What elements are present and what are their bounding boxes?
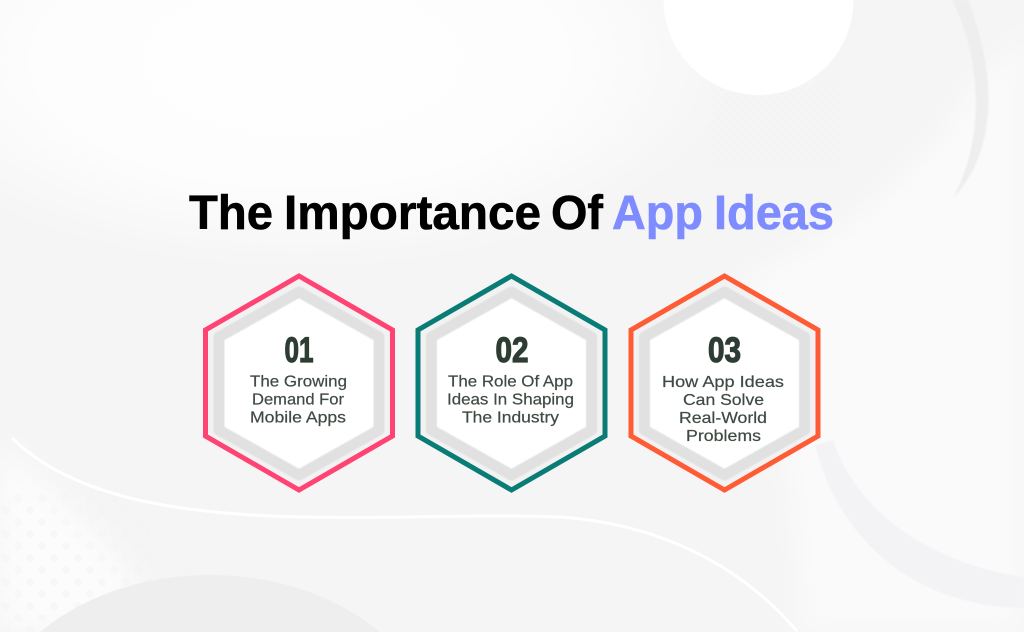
white circle	[664, 0, 854, 95]
text: The Growing	[250, 374, 347, 390]
title	[189, 187, 834, 240]
number: 02	[496, 331, 528, 370]
inner ring	[432, 292, 592, 475]
text: Ideas In Shaping	[447, 392, 574, 408]
text: How App Ideas	[662, 374, 784, 391]
number: 01	[284, 331, 314, 370]
white curve	[12, 438, 797, 631]
title word: Of: Of	[551, 187, 604, 240]
inner ring	[644, 292, 804, 475]
panel: hexagon 02	[418, 276, 605, 490]
hexagon frame	[206, 276, 392, 490]
text: Demand For	[252, 392, 345, 408]
text: Can Solve	[683, 392, 764, 409]
text: The Role Of App	[448, 374, 573, 390]
panel: hexagon 03	[631, 276, 818, 490]
right crescent	[952, 0, 988, 198]
lower right band	[815, 440, 1024, 608]
text: Problems	[686, 428, 761, 445]
text: The Industry	[462, 410, 559, 426]
text: Real-World	[679, 410, 767, 427]
number: 03	[708, 331, 741, 370]
title word: Importance: Importance	[284, 187, 541, 240]
bottom left circle	[40, 575, 380, 632]
inner ring	[219, 292, 379, 475]
hexagon frame	[631, 276, 818, 490]
title word: The: The	[189, 187, 273, 240]
panel: hexagon 01	[206, 276, 392, 490]
title word: App: App	[612, 187, 703, 240]
text: Mobile Apps	[250, 410, 346, 426]
hexagon frame	[418, 276, 605, 490]
title word: Ideas: Ideas	[714, 187, 834, 240]
